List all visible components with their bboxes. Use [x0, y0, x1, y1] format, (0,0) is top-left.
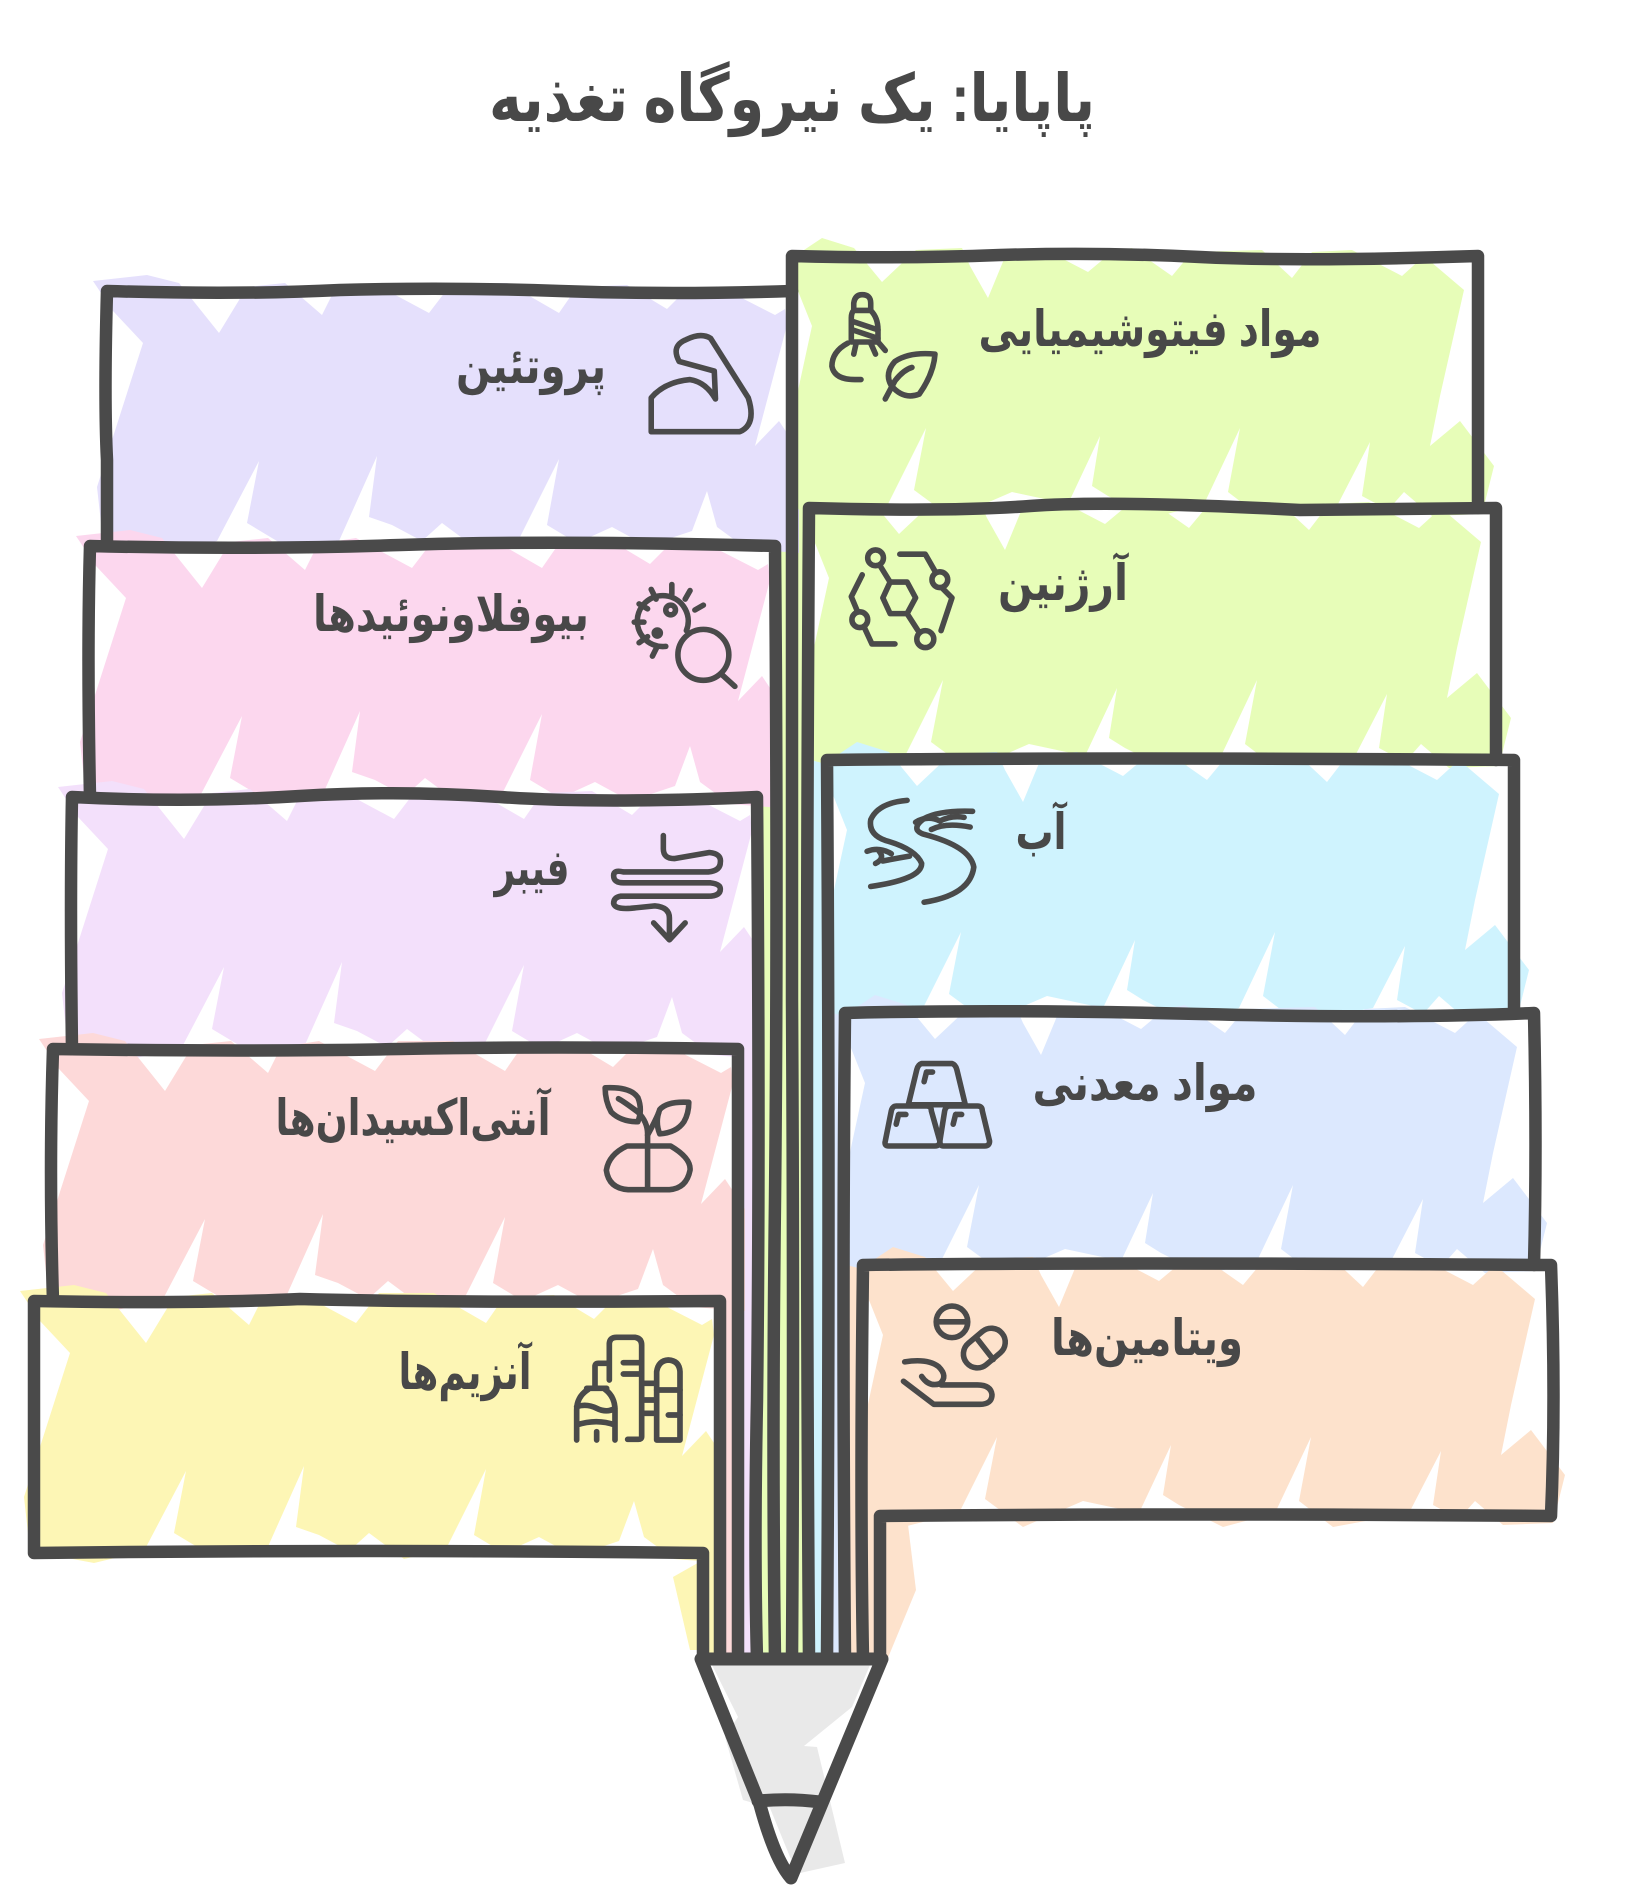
panel: phytochemicals — [786, 238, 1494, 518]
pencil stem colour strips — [673, 500, 916, 1665]
panel: protein — [93, 275, 799, 553]
icon: microbe under magnifier — [634, 585, 735, 686]
outline: vitamins — [862, 1264, 1554, 1659]
label: enzymes: آنزیم‌ها — [398, 1341, 533, 1402]
label: protein: پروتئین — [456, 338, 606, 396]
label: arginine: آرژنین — [998, 552, 1130, 613]
outline: protein — [106, 289, 793, 1659]
icon: pencil tip — [701, 1659, 882, 1878]
outline: minerals — [844, 1011, 1536, 1659]
label: water: آب — [1016, 801, 1068, 860]
panel: minerals — [839, 995, 1547, 1275]
label: bioflavonoids: بیوفلاونوئیدها — [313, 586, 589, 644]
pencil tip fill — [712, 1665, 870, 1873]
outline: phytochemicals — [792, 254, 1478, 508]
panel: bioflavonoids — [76, 530, 782, 808]
icon: intestine with arrow — [614, 836, 720, 940]
panel: enzymes — [20, 1285, 726, 1563]
outline: enzymes — [34, 1299, 720, 1659]
label: minerals: مواد معدنی — [1032, 1055, 1258, 1113]
icon: sprout and pill — [605, 1088, 690, 1190]
panel: vitamins — [857, 1247, 1565, 1527]
icon: molecule — [851, 550, 952, 648]
panel: arginine — [803, 490, 1511, 770]
outline: water — [827, 758, 1514, 1659]
outline: bioflavonoids — [88, 543, 776, 1659]
icon: stacked gold bars — [885, 1064, 990, 1146]
icon: muscle arm — [651, 336, 751, 432]
panel: antioxidants — [39, 1033, 745, 1311]
title: پاپایا: یک نیروگاه تغذیه — [489, 60, 1095, 138]
icon: winding river — [867, 800, 974, 902]
icon: factory with flask — [577, 1337, 680, 1440]
icon: hand with pills — [903, 1306, 1011, 1404]
icon: bulb and leaf — [832, 295, 935, 399]
label: fiber: فیبر — [492, 840, 570, 898]
label: antioxidants: آنتی‌اکسیدان‌ها — [276, 1087, 552, 1146]
label: phytochemicals: مواد فیتوشیمیایی — [978, 301, 1322, 359]
label: vitamins: ویتامین‌ها — [1051, 1310, 1243, 1368]
outline: antioxidants — [51, 1048, 738, 1659]
panel: water — [821, 742, 1529, 1022]
panel: fiber — [58, 781, 764, 1059]
outline: arginine — [807, 504, 1496, 1659]
outline: fiber — [71, 793, 758, 1659]
